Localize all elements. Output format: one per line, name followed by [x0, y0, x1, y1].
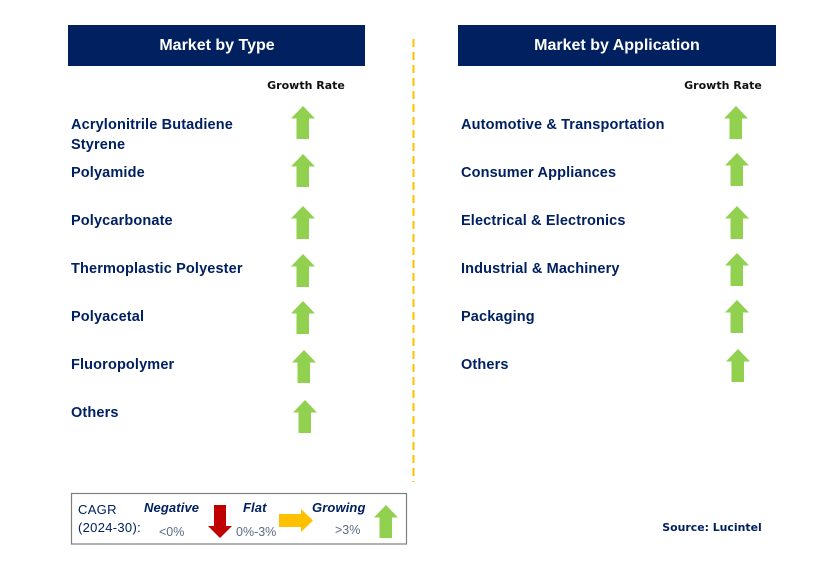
- legend title: [78, 502, 141, 535]
- item: polyamide: [71, 154, 315, 187]
- panel: market by type: [68, 25, 365, 433]
- item: polycarbonate: Polycarbonate: [71, 213, 173, 229]
- legend title: (2024-30):: [78, 520, 141, 535]
- item: packaging: [461, 300, 749, 333]
- item: polycarbonate: [71, 206, 315, 239]
- item: industrial and machinery: Industrial & Machinery: [461, 261, 620, 277]
- legend: growing: [312, 500, 398, 538]
- item: others: Others: [71, 405, 119, 421]
- legend: negative: <0%: [159, 525, 184, 539]
- center divider: [412, 39, 414, 482]
- heading: market by type: [68, 25, 365, 66]
- legend: flat: Flat: [243, 500, 267, 515]
- item: polyacetal: Polyacetal: [71, 309, 144, 325]
- legend: flat: 0%-3%: [236, 525, 276, 539]
- item: others: [461, 349, 750, 382]
- item: automotive and transportation: Automotive & Transportation: [461, 117, 665, 133]
- item: industrial and machinery: [461, 253, 749, 286]
- item: automotive and transportation: [461, 106, 748, 139]
- heading: market by application: [458, 25, 776, 66]
- growth rate label: application: Growth Rate: [684, 79, 762, 92]
- item: others: Others: [461, 357, 509, 373]
- legend: [72, 494, 406, 544]
- item: electrical and electronics: [461, 206, 749, 239]
- item: thermoplastic polyester: [71, 254, 315, 287]
- legend: growing: Growing: [312, 500, 366, 515]
- item: acrylonitrile butadiene styrene: Styrene: [71, 137, 125, 153]
- legend box: [72, 494, 406, 544]
- source: Source: Lucintel: [662, 521, 762, 534]
- legend: growing: >3%: [335, 523, 360, 537]
- panel: market by application: [458, 25, 776, 382]
- item: consumer appliances: Consumer Appliances: [461, 165, 616, 181]
- item: polyamide: Polyamide: [71, 165, 145, 181]
- item: acrylonitrile butadiene styrene: [71, 106, 315, 153]
- heading: market by application: Market by Application: [534, 37, 700, 54]
- growth rate label: type: Growth Rate: [267, 79, 345, 92]
- heading: market by type: Market by Type: [159, 37, 275, 54]
- legend: negative: [144, 500, 232, 539]
- item: fluoropolymer: [71, 350, 316, 383]
- item: acrylonitrile butadiene styrene: Acrylonitrile Butadiene: [71, 117, 233, 133]
- item: consumer appliances: [461, 153, 749, 186]
- item: fluoropolymer: Fluoropolymer: [71, 357, 175, 373]
- item: electrical and electronics: Electrical & Electronics: [461, 213, 626, 229]
- item: packaging: Packaging: [461, 309, 535, 325]
- legend: negative: Negative: [144, 500, 199, 515]
- legend: flat: [236, 500, 313, 539]
- item: polyacetal: [71, 301, 315, 334]
- item: others: [71, 400, 317, 433]
- item: thermoplastic polyester: Thermoplastic Polyester: [71, 261, 243, 277]
- legend title: CAGR: [78, 502, 117, 517]
